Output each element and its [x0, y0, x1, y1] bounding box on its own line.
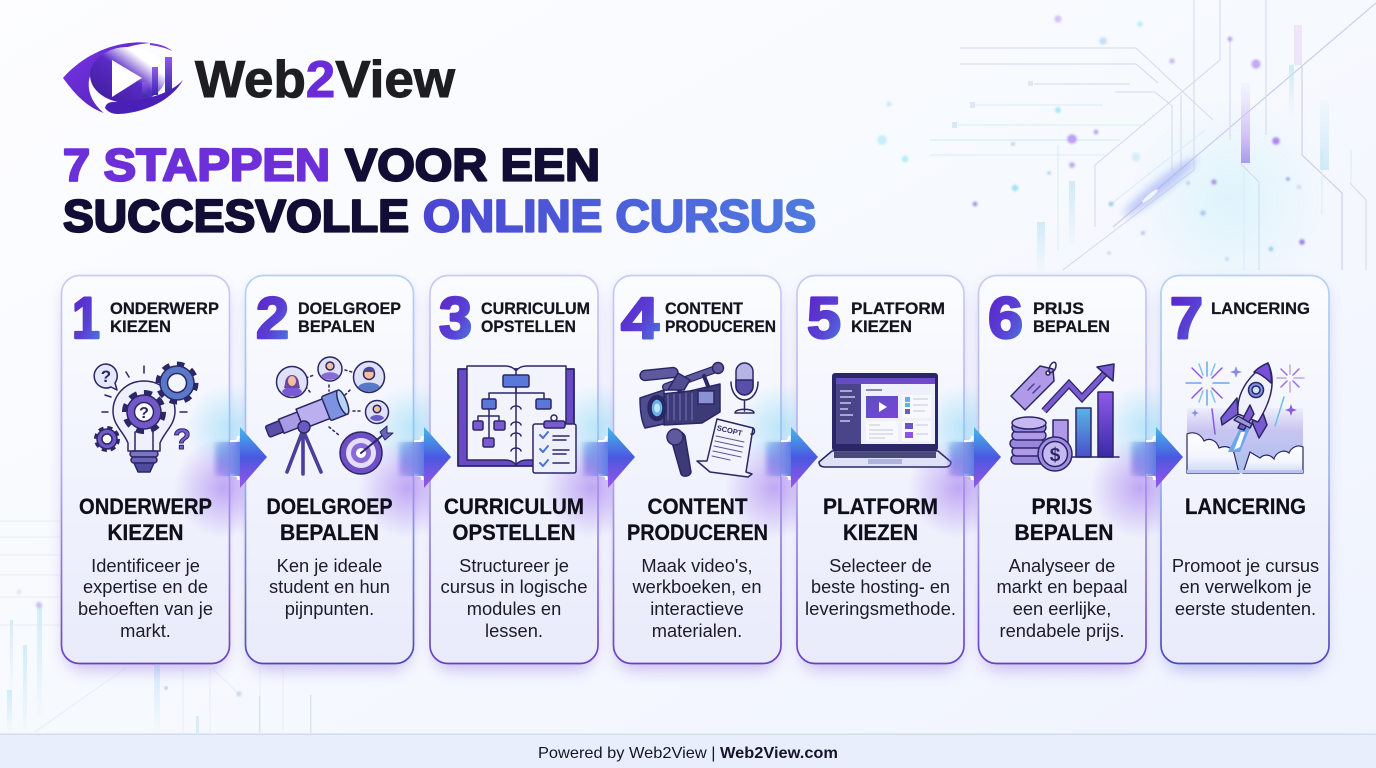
title: SUCCESVOLLE	[63, 190, 409, 242]
small heading 5: PLATFORM	[851, 299, 945, 318]
heading 1	[79, 494, 212, 545]
description 6: een eerlijke,	[1013, 598, 1111, 619]
heading 1: ONDERWERP	[79, 494, 212, 519]
icon: rocket with fireworks and clouds	[1186, 362, 1304, 473]
small heading 4: PRODUCEREN	[665, 317, 776, 336]
arrow 2 to 3	[396, 427, 451, 488]
description 6	[996, 555, 1128, 641]
small heading 6	[1033, 299, 1110, 336]
heading 6: PRIJS	[1032, 494, 1092, 519]
small heading 3: OPSTELLEN	[481, 317, 576, 336]
description 2	[269, 555, 390, 619]
heading 4	[627, 494, 768, 545]
small heading 1	[110, 299, 219, 336]
small heading 4	[665, 299, 776, 336]
icon: laptop with course platform	[819, 373, 951, 467]
description 2: Ken je ideale	[277, 555, 382, 576]
background: circuit decoration top right	[877, 0, 1376, 300]
logo wordmark: Web2View	[195, 51, 456, 109]
small heading 2: BEPALEN	[298, 317, 375, 336]
description 4: Maak video's,	[641, 555, 753, 576]
description 7	[1172, 555, 1319, 619]
heading 5: KIEZEN	[843, 520, 918, 545]
description 3: cursus in logische	[440, 576, 588, 597]
description 6: rendabele prijs.	[1000, 620, 1124, 641]
icon: light bulb with gears: ?	[173, 424, 191, 456]
description 4: materialen.	[652, 620, 742, 641]
small heading 6: PRIJS	[1033, 299, 1084, 318]
title: VOOR EEN	[345, 140, 600, 190]
small heading 4: CONTENT	[665, 299, 744, 318]
description 3: Structureer je	[459, 555, 569, 576]
small heading 2	[298, 299, 401, 336]
description 1	[78, 555, 213, 641]
heading 4: CONTENT	[648, 494, 748, 519]
description 1: expertise en de	[83, 576, 208, 597]
background: circuit decoration bottom left	[0, 521, 311, 733]
heading 6	[1014, 494, 1114, 545]
small heading 3: CURRICULUM	[481, 299, 590, 318]
panel: step 3 curriculum opstellen	[430, 276, 642, 670]
small heading 2: DOELGROEP	[298, 299, 401, 318]
description 5	[805, 555, 956, 619]
icon: open book with flow chart and checklist	[458, 366, 576, 473]
heading 3	[444, 494, 584, 545]
heading 4: PRODUCEREN	[627, 520, 768, 545]
arrow 6 to 7	[1128, 427, 1183, 488]
icon: telescope, audience and target	[263, 357, 393, 474]
description 3: modules en	[467, 598, 561, 619]
description 2: student en hun	[269, 576, 390, 597]
description 5: leveringsmethode.	[805, 598, 956, 619]
small heading 7: LANCERING	[1211, 299, 1310, 318]
heading 3: CURRICULUM	[444, 494, 584, 519]
step number 3: 3	[439, 286, 472, 351]
panel: step 1 onderwerp kiezen	[62, 276, 274, 670]
logo	[63, 42, 456, 114]
description 7: eerste studenten.	[1175, 598, 1316, 619]
description 7: Promoot je cursus	[1172, 555, 1319, 576]
description 5: Selecteer de	[829, 555, 932, 576]
arrow 1 to 2	[212, 427, 267, 488]
panel: step 7 lancering	[1161, 276, 1329, 670]
title	[63, 140, 816, 242]
icon: eye with play button and bars	[63, 42, 183, 114]
heading 1: KIEZEN	[108, 520, 184, 545]
description 4: interactieve	[650, 598, 744, 619]
description 7: en verwelkom je	[1179, 576, 1312, 597]
small heading 6: BEPALEN	[1033, 317, 1110, 336]
heading 2: DOELGROEP	[266, 494, 392, 519]
icon: video camera, microphones and script	[640, 362, 758, 477]
panel: step 4 content produceren	[614, 276, 825, 670]
description 1: behoeften van je	[78, 598, 213, 619]
heading 3: OPSTELLEN	[452, 520, 576, 545]
heading 7: LANCERING	[1185, 494, 1306, 519]
description 3: lessen.	[485, 620, 543, 641]
icon: price tag, coins and growth chart	[1010, 362, 1119, 471]
description 5: beste hosting- en	[811, 576, 950, 597]
icon: light bulb with gears: ?	[101, 367, 111, 386]
step number 6: 6	[988, 286, 1023, 351]
icon: price tag, coins and growth chart: $	[1050, 445, 1061, 466]
small heading 5: KIEZEN	[851, 317, 912, 336]
description 2: pijnpunten.	[285, 598, 374, 619]
description 6: markt en bepaal	[996, 576, 1128, 597]
description 1: Identificeer je	[91, 555, 200, 576]
footer bar	[0, 734, 1376, 768]
panel: step 6 prijs bepalen	[978, 276, 1190, 670]
small heading 3	[481, 299, 590, 336]
step number 1: 1	[72, 286, 100, 351]
icon: light bulb with gears: ?	[139, 405, 149, 422]
arrow 3 to 4	[580, 427, 635, 488]
arrow 5 to 6	[946, 427, 1001, 488]
step number 5: 5	[807, 286, 841, 351]
small heading 5	[851, 299, 945, 336]
title: 7 STAPPEN	[63, 140, 330, 190]
icon: video camera, microphones and script: SCOPT	[716, 423, 744, 438]
heading 6: BEPALEN	[1014, 520, 1114, 545]
heading 5: PLATFORM	[823, 494, 938, 519]
description 6: Analyseer de	[1009, 555, 1115, 576]
icon: light bulb with gears	[94, 364, 195, 472]
panel: step 5 platform kiezen	[797, 276, 1008, 670]
step number 2: 2	[256, 286, 289, 351]
heading 2: BEPALEN	[280, 520, 379, 545]
description 4: werkboeken, en	[631, 576, 762, 597]
small heading 1: ONDERWERP	[110, 299, 219, 318]
title: ONLINE CURSUS	[423, 190, 816, 242]
heading 2	[266, 494, 392, 545]
arrow 4 to 5	[763, 427, 818, 488]
description 1: markt.	[120, 620, 171, 641]
step number 4: 4	[621, 286, 659, 351]
step number 7: 7	[1170, 286, 1203, 351]
description 3	[440, 555, 588, 641]
footer text: Powered by Web2View | Web2View.com	[538, 745, 838, 762]
description 4	[631, 555, 762, 641]
heading 5	[823, 494, 938, 545]
small heading 1: KIEZEN	[110, 317, 171, 336]
panel: step 2 doelgroep bepalen	[246, 276, 458, 670]
